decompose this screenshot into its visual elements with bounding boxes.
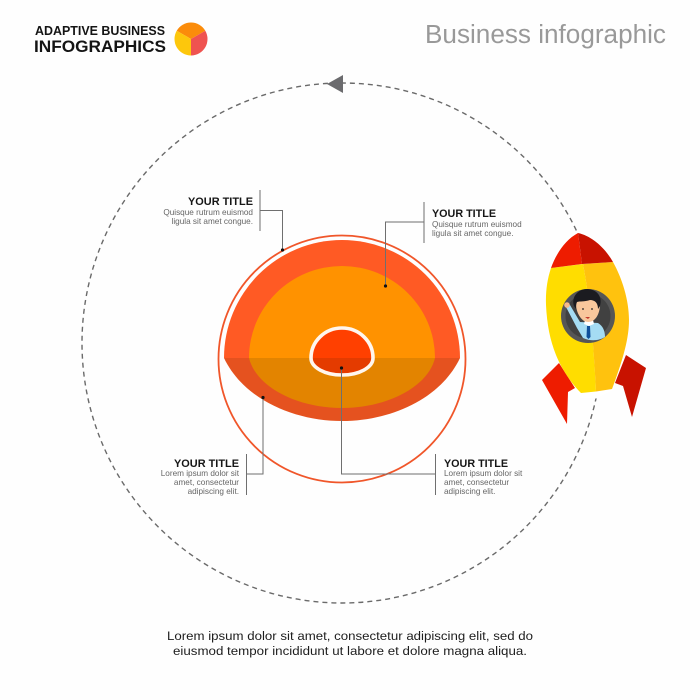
logo	[34, 22, 208, 56]
leader line	[246, 396, 265, 495]
footer text: eiusmod tempor incididunt ut labore et dolore magna aliqua.	[173, 644, 527, 658]
body text: adipiscing elit.	[444, 487, 495, 496]
pilot collar	[584, 320, 594, 326]
title: YOUR TITLE	[174, 458, 239, 470]
body text: ligula sit amet congue.	[172, 217, 253, 226]
dashed orbit	[82, 83, 602, 603]
rocket	[542, 233, 646, 424]
pilot hair	[573, 289, 601, 309]
porthole with pilot	[561, 289, 615, 343]
leader line	[340, 366, 436, 495]
body text	[161, 469, 240, 496]
body text: adipiscing elit.	[188, 487, 239, 496]
right fin	[615, 355, 646, 417]
body text	[432, 220, 522, 238]
rocket nose right	[578, 233, 613, 264]
leader line	[260, 190, 284, 252]
body text: Lorem ipsum dolor sit	[161, 469, 240, 478]
logo text	[34, 23, 166, 56]
core	[311, 328, 373, 375]
left fin	[542, 363, 575, 424]
rocket body left	[546, 264, 596, 393]
footer text: Lorem ipsum dolor sit amet, consectetur adipiscing elit, sed do	[167, 629, 533, 643]
pilot arm and torso	[566, 305, 605, 340]
rocket nose left	[551, 233, 582, 268]
outer ring	[218, 236, 466, 482]
logo text: INFOGRAPHICS	[34, 38, 166, 56]
leader line	[384, 202, 424, 288]
footer text	[167, 629, 533, 658]
body text: Quisque rutrum euismod	[163, 208, 253, 217]
callout: top right	[384, 202, 522, 288]
body text	[444, 469, 523, 496]
logo text: ADAPTIVE BUSINESS	[35, 23, 165, 38]
body text: Lorem ipsum dolor sit	[444, 469, 523, 478]
rocket body right	[583, 262, 629, 392]
sphere diagram	[218, 236, 466, 482]
middle layer	[249, 266, 435, 408]
icon: logo pie	[174, 22, 208, 56]
white gap over orbit	[546, 233, 629, 397]
page heading: Business infographic	[425, 21, 666, 49]
body text: ligula sit amet congue.	[432, 229, 513, 238]
pilot eyes and mouth	[582, 308, 593, 319]
callout: bottom right	[340, 366, 523, 496]
arrow: orbit direction	[327, 75, 343, 93]
body text: Quisque rutrum euismod	[432, 220, 522, 229]
title: YOUR TITLE	[188, 196, 253, 208]
callout: bottom left	[161, 396, 265, 496]
body text: amet, consectetur	[444, 478, 509, 487]
body text	[163, 208, 253, 226]
outer layer	[224, 240, 460, 421]
pilot tie	[586, 326, 590, 339]
title: YOUR TITLE	[432, 208, 496, 220]
body text: amet, consectetur	[174, 478, 239, 487]
callout: top left	[163, 190, 284, 252]
title: YOUR TITLE	[444, 458, 508, 470]
pilot face	[576, 298, 600, 322]
pilot hand	[564, 302, 570, 308]
